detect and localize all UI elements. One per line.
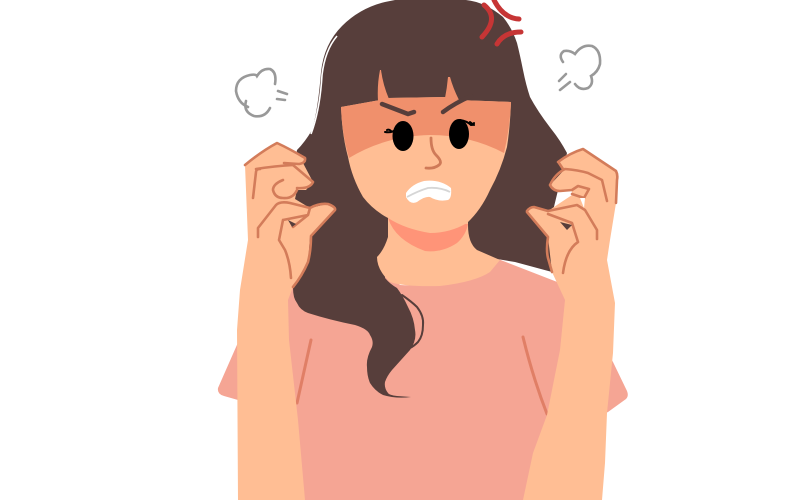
finger outlines [527, 149, 617, 273]
hair gap: right hand [560, 222, 572, 230]
hair [285, 0, 567, 398]
face shadow band [341, 97, 511, 158]
finger outlines [245, 143, 335, 287]
nose [426, 138, 440, 168]
sleeve crease: right [523, 337, 547, 414]
bangs slit: left [378, 70, 389, 101]
bangs slit: right [445, 77, 459, 100]
mouth [406, 181, 451, 203]
eyebrow: right [443, 96, 471, 112]
white gap: right hand [580, 198, 585, 208]
anger mark [482, 0, 521, 44]
hair highlight [311, 36, 337, 134]
teeth line [407, 188, 450, 197]
face [341, 70, 511, 233]
steam puff: left [236, 69, 287, 116]
eye: left [385, 121, 414, 151]
hair gap: left hand [288, 220, 296, 227]
hair lock strand [402, 295, 423, 348]
eyebrow: left [382, 104, 414, 114]
sleeve crease: left [297, 340, 311, 403]
neck [377, 215, 500, 286]
left arm and hand [237, 143, 335, 500]
eye: right [449, 119, 474, 149]
steam puff: right [559, 46, 600, 90]
shirt [218, 259, 628, 500]
neck shadow [388, 218, 468, 251]
right arm and hand [523, 149, 617, 500]
